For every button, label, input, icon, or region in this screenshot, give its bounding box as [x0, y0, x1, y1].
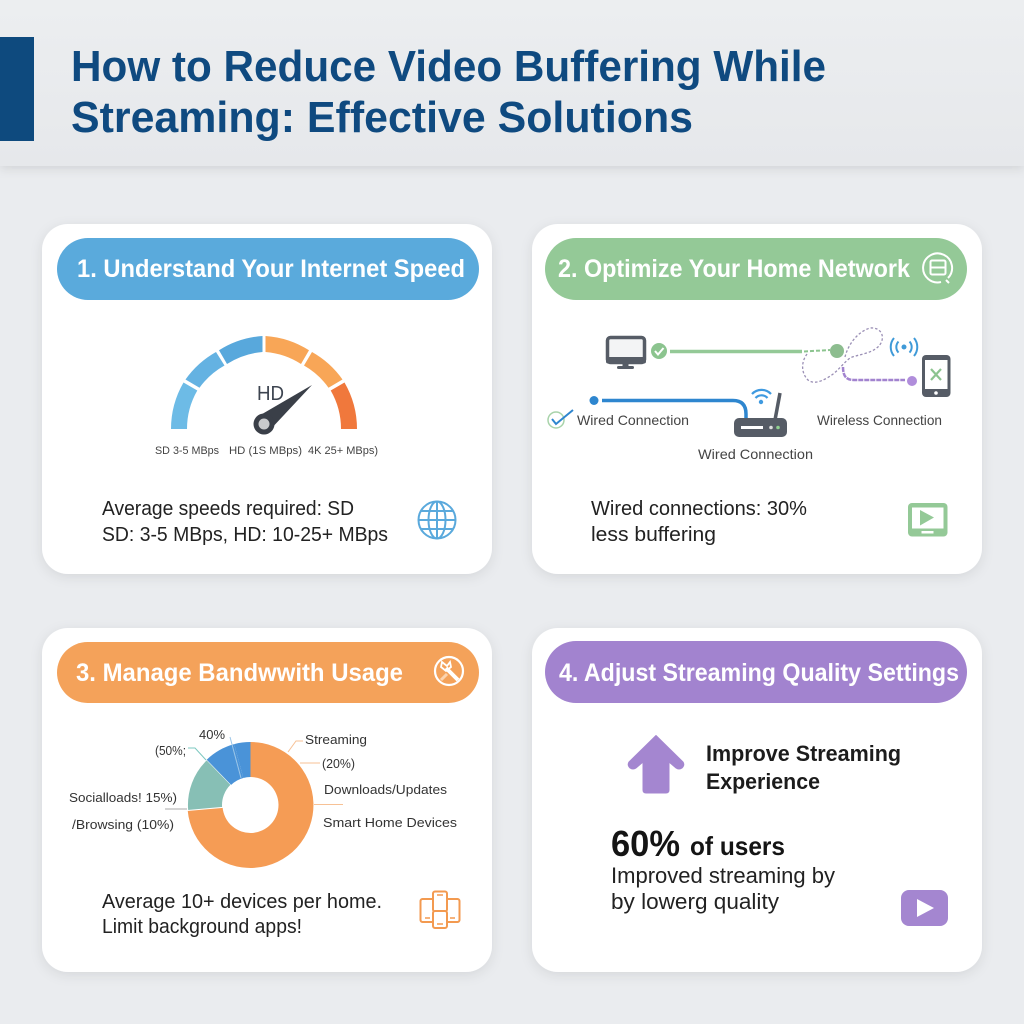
icon: monitor: [606, 338, 646, 369]
statistic: 60% of users: of users: [690, 831, 785, 861]
text: average devices: Limit background apps!: [102, 916, 302, 938]
donut chart: (50%;: [155, 743, 186, 758]
panel: understand your internet speed: [42, 224, 492, 574]
text: wired connections: less buffering: [591, 524, 716, 546]
text: average devices: [102, 891, 382, 938]
title: [71, 42, 826, 142]
speed gauge: SD 3-5 MBps: [155, 445, 219, 457]
title: How to Reduce Video Buffering While: [71, 42, 826, 91]
icon: blue check: [548, 410, 573, 428]
donut chart: Streaming: [305, 732, 367, 747]
text: average speeds: SD: 3-5 MBps, HD: 10-25+ MBps: [102, 524, 388, 546]
heading pill 4: [545, 641, 967, 703]
donut chart: /Browsing (10%): [72, 817, 174, 832]
title: Streaming: Effective Solutions: [71, 93, 693, 142]
donut chart: (20%): [322, 756, 355, 771]
heading pill 3: [57, 642, 479, 703]
header accent bar: [0, 37, 34, 141]
heading pill 2: 2. Optimize Your Home Network: [558, 255, 910, 283]
text: improve streaming experience: [706, 741, 901, 794]
network diagram: Wired Connection: [698, 446, 813, 462]
donut chart: Downloads/Updates: [324, 782, 448, 797]
text: average speeds: [102, 498, 388, 546]
icon: wireless signal: [891, 338, 917, 356]
icon: globe: [418, 502, 456, 538]
icon: phone: [922, 355, 950, 397]
icon: play button: [901, 890, 948, 926]
icon: tools: [435, 657, 463, 685]
donut chart: Smart Home Devices: [323, 815, 458, 830]
heading pill 3: 3. Manage Bandwwith Usage: [76, 659, 403, 687]
network diagram: Wired Connection: [577, 412, 689, 428]
icon: devices: [420, 892, 460, 928]
panel: manage bandwidth usage: [42, 628, 492, 972]
header band: [0, 0, 1024, 166]
text: wired connections: [591, 498, 807, 546]
icon: up arrow: [628, 736, 684, 793]
statistic: 60% of users: [611, 823, 785, 864]
text: average speeds: Average speeds required: SD: [102, 498, 354, 520]
icon: network settings: [923, 253, 952, 283]
icon: video screen: [908, 503, 948, 536]
heading pill 4: 4. Adjust Streaming Quality Settings: [559, 659, 959, 687]
donut chart: [69, 727, 458, 868]
speed gauge: 4K 25+ MBps): [308, 445, 378, 457]
text: wired connections: Wired connections: 30%: [591, 498, 807, 520]
panel: optimize your home network: [532, 224, 982, 574]
text: average devices: Average 10+ devices per home.: [102, 891, 382, 913]
icon: check badge: [651, 343, 667, 359]
heading pill 2: [545, 238, 967, 300]
speed gauge: [155, 336, 378, 457]
text: improved streaming: Improved streaming by: [611, 863, 835, 888]
text: improve streaming experience: Improve Streaming: [706, 741, 901, 766]
heading pill 1: 1. Understand Your Internet Speed: [77, 255, 465, 283]
text: improved streaming: [611, 863, 835, 914]
panel: adjust streaming quality settings: [532, 628, 982, 972]
speed gauge: HD (1S MBps): [229, 445, 302, 457]
text: improved streaming: by lowerg quality: [611, 889, 779, 914]
heading pill 1: [57, 238, 479, 300]
donut chart: 40%: [199, 727, 225, 742]
donut chart: Socialloads! 15%): [69, 790, 177, 805]
network diagram: Wireless Connection: [817, 412, 942, 428]
text: improve streaming experience: Experience: [706, 769, 820, 794]
statistic: 60% of users: 60%: [611, 823, 680, 864]
icon: router: [734, 390, 787, 437]
speed gauge: HD: [257, 383, 284, 405]
network diagram: [548, 328, 950, 462]
